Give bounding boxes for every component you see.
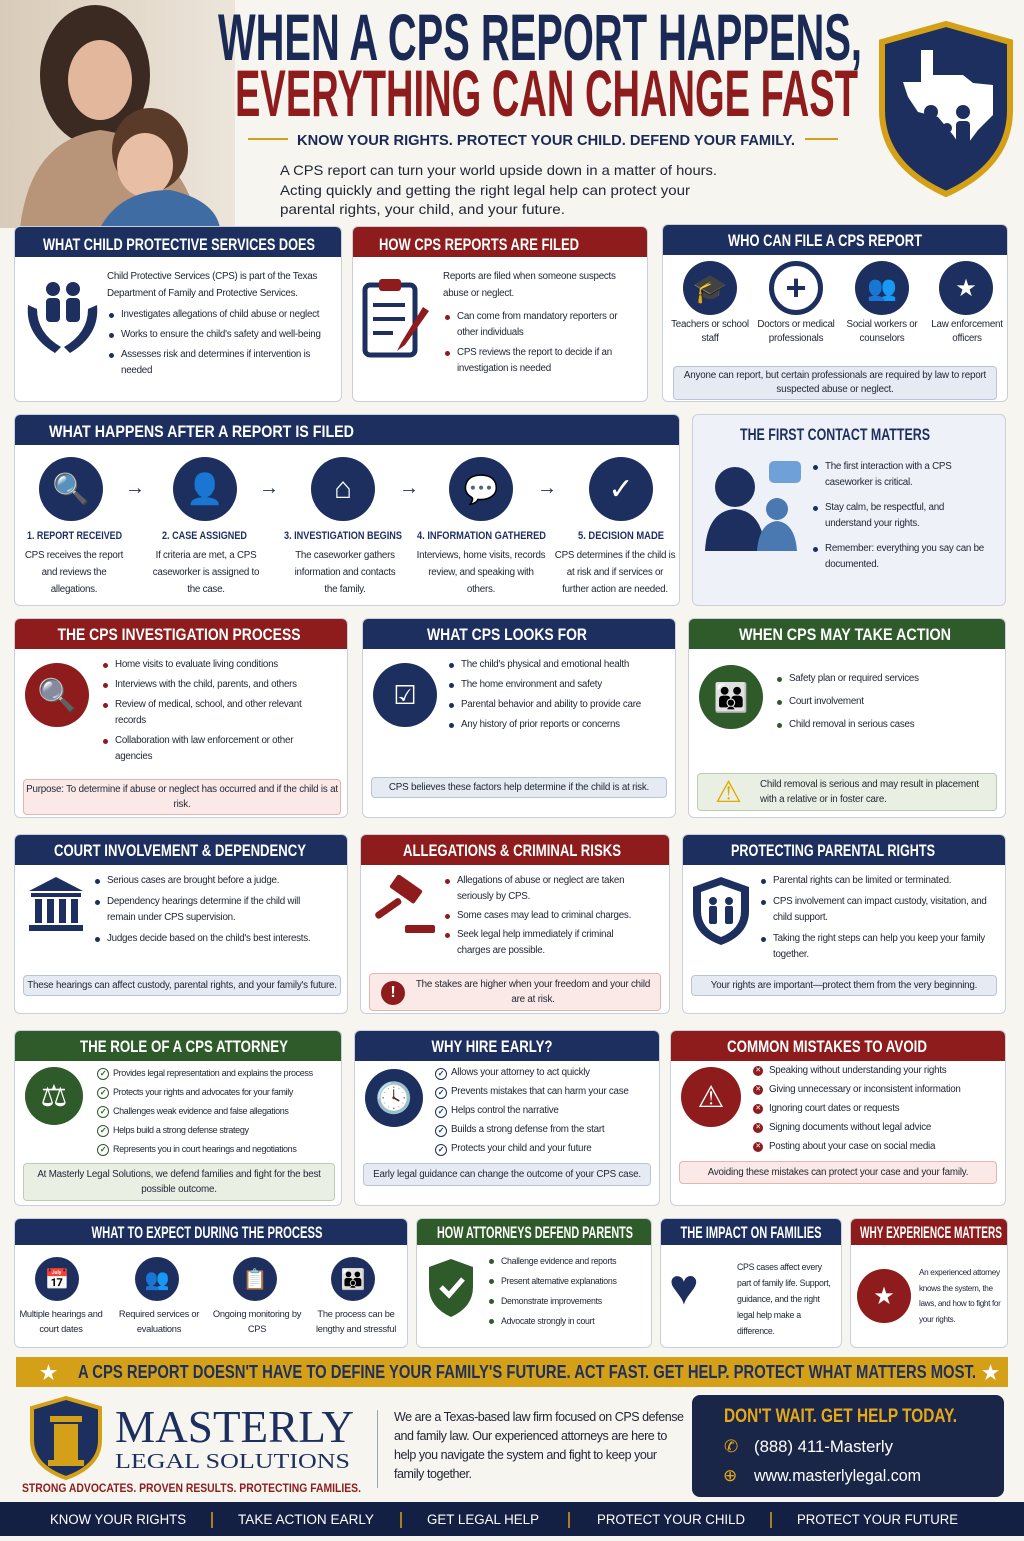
bottom bar: GET LEGAL HELP bbox=[427, 1512, 539, 1527]
steps: CPS determines if the child is at risk and if services or further action are needed. bbox=[555, 550, 675, 595]
panel: first contact: The first interaction with a CPS caseworker is critical. bbox=[825, 461, 952, 488]
panel: why hire early: Builds a strong defense from the start bbox=[451, 1124, 604, 1135]
panel: what CPS does: Child Protective Services (CPS) is part of the Texas Department of Family and Protective Services. bbox=[107, 271, 317, 299]
panel: what CPS looks for: CPS believes these factors help determine if the child is at risk. bbox=[389, 782, 649, 793]
logo: MASTERLY bbox=[115, 1401, 354, 1452]
bottom bar bbox=[0, 1502, 1024, 1536]
panel: court involvement: Judges decide based on the child's best interests. bbox=[107, 933, 310, 944]
panel: when CPS may take action: Safety plan or required services bbox=[789, 673, 919, 684]
icon: alert: ! bbox=[390, 984, 396, 1001]
panel: role of CPS attorney: THE ROLE OF A CPS ATTORNEY bbox=[80, 1037, 289, 1056]
panel: allegations criminal risks: The stakes are higher when your freedom and your child are at risk. bbox=[416, 979, 650, 1005]
panel: what CPS looks for: The child's physical and emotional health bbox=[461, 659, 629, 670]
logo bbox=[22, 1396, 361, 1495]
panel: role of CPS attorney: Protects your rights and advocates for your family bbox=[113, 1087, 293, 1097]
panel: why hire early: Allows your attorney to act quickly bbox=[451, 1067, 590, 1078]
panel: how attorneys defend: Advocate strongly in court bbox=[501, 1316, 594, 1326]
panel: first contact: Remember: everything you say can be documented. bbox=[825, 543, 984, 570]
panel: why experience matters: An experienced attorney knows the system, the laws, and how to fight for your rights. bbox=[919, 1268, 1000, 1324]
panel: first contact: Stay calm, be respectful, and understand your rights. bbox=[825, 502, 944, 529]
panel: what to expect: The process can be lengthy and stressful bbox=[316, 1309, 396, 1334]
panel: how reports filed: Can come from mandatory reporters or other individuals bbox=[457, 311, 617, 338]
contact box: ⊕ bbox=[723, 1466, 737, 1485]
steps: 3. INVESTIGATION BEGINS bbox=[284, 530, 402, 542]
panel: how attorneys defend: Demonstrate improvements bbox=[501, 1296, 602, 1306]
panel: protecting parental rights: CPS involvement can impact custody, visitation, and child support. bbox=[773, 896, 987, 923]
panel: impact on families: CPS cases affect every part of family life. Support, guidance, and the right legal help make a difference. bbox=[737, 1262, 830, 1336]
text: We are a Texas-based law firm focused on CPS defense and family law. Our experienced attorneys are here to help you navigate the system and fight to keep your family together. bbox=[394, 1410, 684, 1481]
photo: mother and child bbox=[0, 0, 235, 228]
panel: why experience matters bbox=[850, 1218, 1008, 1348]
panel: role of CPS attorney: At Masterly Legal Solutions, we defend families and fight for the best possible outcome. bbox=[37, 1169, 321, 1195]
contact box bbox=[692, 1395, 1004, 1497]
panel: role of CPS attorney: Provides legal representation and explains the process bbox=[113, 1068, 313, 1078]
icon: checklist: ☑ bbox=[393, 680, 417, 710]
icon: magnifier bbox=[25, 663, 89, 727]
panel: what to expect: Ongoing monitoring by CPS bbox=[213, 1309, 301, 1334]
panel: role of CPS attorney: Challenges weak evidence and false allegations bbox=[113, 1106, 289, 1116]
icon: warning: ⚠ bbox=[715, 776, 742, 809]
icon: checklist bbox=[373, 663, 437, 727]
steps: 👤 bbox=[186, 472, 224, 506]
icons: reporters: + bbox=[785, 267, 807, 308]
icons: reporters: ★ bbox=[955, 274, 977, 302]
panel: first contact: THE FIRST CONTACT MATTERS bbox=[740, 425, 930, 444]
icons: reporters: Teachers or school staff bbox=[671, 319, 749, 344]
panel: what to expect: Multiple hearings and court dates bbox=[19, 1309, 103, 1334]
icon: clipboard bbox=[362, 279, 429, 358]
panel: what to expect: 📋 bbox=[243, 1268, 267, 1290]
panel: what CPS does: Investigates allegations of child abuse or neglect bbox=[121, 309, 319, 320]
panel: when CPS may take action bbox=[688, 618, 1006, 818]
panel: what to expect: Required services or evaluations bbox=[119, 1309, 199, 1334]
icon: hands family bbox=[28, 282, 98, 353]
intro paragraph: A CPS report can turn your world upside down in a matter of hours. bbox=[280, 162, 717, 178]
icon: family green: 👪 bbox=[714, 682, 748, 712]
panel: common mistakes bbox=[670, 1030, 1006, 1206]
panel: common mistakes: COMMON MISTAKES TO AVOID bbox=[727, 1037, 927, 1056]
panel: when CPS may take action: Child removal in serious cases bbox=[789, 719, 914, 730]
panel: common mistakes: Signing documents without legal advice bbox=[769, 1122, 931, 1133]
panel: role of CPS attorney bbox=[14, 1030, 342, 1206]
panel: why hire early: WHY HIRE EARLY? bbox=[432, 1037, 552, 1056]
panel: court involvement: These hearings can affect custody, parental rights, and your family's future. bbox=[27, 980, 337, 991]
panel: first contact bbox=[692, 414, 1006, 606]
contact box: www.masterlylegal.com bbox=[753, 1466, 921, 1485]
panel: protecting parental rights: Your rights are important—protect them from the very beginning. bbox=[711, 980, 977, 991]
steps: → bbox=[399, 477, 419, 499]
steps: → bbox=[125, 477, 145, 499]
panel: what to expect: 👪 bbox=[341, 1268, 365, 1290]
icons: reporters: 👥 bbox=[867, 274, 897, 302]
bottom bar: TAKE ACTION EARLY bbox=[238, 1512, 374, 1527]
panel: when CPS may take action: WHEN CPS MAY TAKE ACTION bbox=[739, 625, 951, 644]
bottom bar: PROTECT YOUR FUTURE bbox=[797, 1512, 958, 1527]
icons: reporters: 🎓 bbox=[693, 272, 727, 304]
icon: alert bbox=[381, 981, 405, 1005]
steps: 4. INFORMATION GATHERED bbox=[417, 530, 546, 542]
panel: common mistakes: Ignoring court dates or requests bbox=[769, 1103, 899, 1114]
panel: impact on families bbox=[660, 1218, 842, 1348]
panel: allegations criminal risks: Seek legal help immediately if criminal charges are possible. bbox=[457, 929, 613, 956]
contact box: (888) 411-Masterly bbox=[754, 1437, 893, 1456]
panel: how reports filed: Reports are filed when someone suspects abuse or neglect. bbox=[443, 271, 616, 299]
icons: reporters: Social workers or counselors bbox=[847, 319, 917, 344]
steps: 2. CASE ASSIGNED bbox=[162, 530, 247, 542]
icon: warning red bbox=[681, 1067, 741, 1127]
logo: LEGAL SOLUTIONS bbox=[115, 1449, 350, 1473]
contact box: DON'T WAIT. GET HELP TODAY. bbox=[724, 1406, 957, 1427]
panel: protecting parental rights bbox=[682, 834, 1006, 1014]
panel: when CPS may take action: Court involvement bbox=[789, 696, 864, 707]
panel: investigation process: THE CPS INVESTIGATION PROCESS bbox=[58, 625, 300, 644]
icon: family green bbox=[699, 665, 763, 729]
panel: what CPS looks for: WHAT CPS LOOKS FOR bbox=[427, 625, 587, 644]
panel: what to expect bbox=[14, 1218, 408, 1348]
steps: The caseworker gathers information and contacts the family. bbox=[295, 550, 395, 595]
panel: common mistakes: Giving unnecessary or inconsistent information bbox=[769, 1084, 961, 1095]
panel: allegations criminal risks: Allegations of abuse or neglect are taken seriously by CPS. bbox=[457, 875, 624, 902]
panel: court involvement: Serious cases are brought before a judge. bbox=[107, 875, 279, 886]
panel: investigation process: Home visits to evaluate living conditions bbox=[115, 659, 278, 670]
banner: ★ bbox=[40, 1363, 57, 1384]
panel: investigation process: Collaboration with law enforcement or other agencies bbox=[115, 735, 293, 762]
title bbox=[218, 0, 862, 125]
panel: what CPS does: Assesses risk and determines if intervention is needed bbox=[121, 349, 310, 376]
banner: ★ bbox=[982, 1363, 999, 1384]
steps: If criteria are met, a CPS caseworker is assigned to the case. bbox=[153, 550, 259, 595]
icon: clock: 🕓 bbox=[375, 1082, 413, 1114]
panel: what CPS looks for: Parental behavior and ability to provide care bbox=[461, 699, 641, 710]
icon: scales bbox=[25, 1067, 83, 1125]
icons: reporters: Doctors or medical professionals bbox=[757, 319, 835, 344]
panel: what happens after report bbox=[14, 414, 680, 606]
steps: Interviews, home visits, records review, and speaking with others. bbox=[417, 550, 545, 595]
icon: courthouse bbox=[29, 877, 83, 931]
panel: protecting parental rights: Parental rights can be limited or terminated. bbox=[773, 875, 951, 886]
icon: warning red: ⚠ bbox=[698, 1080, 724, 1114]
panel: why hire early: Helps control the narrative bbox=[451, 1105, 559, 1116]
panel: how attorneys defend: Challenge evidence and reports bbox=[501, 1256, 616, 1266]
panel: impact on families: ♥ bbox=[669, 1259, 699, 1315]
steps: 5. DECISION MADE bbox=[578, 530, 664, 542]
panel: how reports filed bbox=[352, 226, 648, 402]
about text bbox=[377, 1410, 378, 1488]
icons: reporters: Law enforcement officers bbox=[931, 319, 1003, 344]
icon: Texas shield bbox=[879, 20, 1013, 198]
icon: magnifier: 🔍 bbox=[37, 677, 77, 713]
icon: conversation bbox=[705, 461, 801, 551]
steps: 1. REPORT RECEIVED bbox=[27, 530, 122, 542]
icon: shield family bbox=[693, 877, 749, 945]
panel: court involvement: Dependency hearings determine if the child will remain under CPS supervision. bbox=[107, 896, 300, 923]
panel: investigation process: Interviews with the child, parents, and others bbox=[115, 679, 297, 690]
panel: what CPS looks for: The home environment and safety bbox=[461, 679, 602, 690]
panel: allegations criminal risks bbox=[360, 834, 670, 1014]
panel: court involvement bbox=[14, 834, 348, 1014]
panel: why hire early: Early legal guidance can change the outcome of your CPS case. bbox=[373, 1169, 641, 1180]
panel: role of CPS attorney: Represents you in court hearings and negotiations bbox=[113, 1144, 296, 1154]
panel: what CPS does bbox=[14, 226, 342, 402]
steps: → bbox=[259, 477, 279, 499]
panel: investigation process bbox=[14, 618, 348, 818]
panel: why hire early: Prevents mistakes that can harm your case bbox=[451, 1086, 629, 1097]
panel: how attorneys defend: Present alternative explanations bbox=[501, 1276, 617, 1286]
panel: what CPS does: Works to ensure the child's safety and well-being bbox=[121, 329, 321, 340]
bottom bar: PROTECT YOUR CHILD bbox=[597, 1512, 745, 1527]
panel: what happens after report: WHAT HAPPENS AFTER A REPORT IS FILED bbox=[49, 422, 354, 441]
intro paragraph bbox=[280, 162, 717, 217]
panel: common mistakes: Avoiding these mistakes can protect your case and your family. bbox=[708, 1167, 968, 1178]
panel: why hire early bbox=[354, 1030, 660, 1206]
intro paragraph: Acting quickly and getting the right legal help can protect your bbox=[280, 182, 690, 198]
steps: 🔍 bbox=[52, 472, 90, 506]
panel: how attorneys defend bbox=[416, 1218, 652, 1348]
contact box: ✆ bbox=[724, 1437, 738, 1456]
icon: gavel bbox=[375, 875, 435, 933]
panel: what to expect: 👥 bbox=[145, 1268, 169, 1290]
icon: scales: ⚖ bbox=[41, 1080, 67, 1112]
steps: → bbox=[537, 477, 557, 499]
panel: what to expect: 📅 bbox=[45, 1268, 69, 1290]
panel: who can file: Anyone can report, but certain professionals are required by law to report suspected abuse or neglect. bbox=[684, 370, 986, 395]
panel: allegations criminal risks: Some cases may lead to criminal charges. bbox=[457, 910, 631, 921]
steps bbox=[25, 457, 676, 595]
panel: protecting parental rights: PROTECTING PARENTAL RIGHTS bbox=[731, 841, 935, 860]
panel: how reports filed: CPS reviews the report to decide if an investigation is needed bbox=[457, 347, 612, 374]
icons: reporters bbox=[671, 261, 1003, 344]
panel: why hire early: Protects your child and your future bbox=[451, 1143, 591, 1154]
steps: 💬 bbox=[464, 474, 498, 504]
banner bbox=[16, 1357, 1008, 1387]
panel: how reports filed: HOW CPS REPORTS ARE FILED bbox=[379, 235, 579, 254]
steps: ⌂ bbox=[334, 472, 352, 505]
bottom bar: KNOW YOUR RIGHTS bbox=[50, 1512, 186, 1527]
panel: protecting parental rights: Taking the right steps can help you keep your family together. bbox=[773, 933, 985, 960]
panel: why experience matters: ★ bbox=[873, 1282, 895, 1310]
panel: who can file: WHO CAN FILE A CPS REPORT bbox=[728, 231, 922, 250]
panel: investigation process: Review of medical, school, and other relevant records bbox=[115, 699, 301, 726]
steps: ✓ bbox=[608, 472, 634, 506]
panel: common mistakes: Posting about your case on social media bbox=[769, 1141, 935, 1152]
panel: role of CPS attorney: Helps build a strong defense strategy bbox=[113, 1125, 249, 1135]
panel: common mistakes: Speaking without understanding your rights bbox=[769, 1065, 946, 1076]
panel: investigation process: Purpose: To determine if abuse or neglect has occurred and if the child is at risk. bbox=[26, 784, 338, 810]
panel: who can file bbox=[662, 224, 1008, 402]
intro paragraph: parental rights, your child, and your future. bbox=[280, 201, 565, 217]
icon: clock bbox=[365, 1069, 423, 1127]
panel: what CPS looks for bbox=[362, 618, 676, 818]
subtitle: KNOW YOUR RIGHTS. PROTECT YOUR CHILD. DEFEND YOUR FAMILY. bbox=[297, 132, 795, 149]
panel: when CPS may take action: Child removal is serious and may result in placement with a relative or in foster care. bbox=[760, 779, 979, 805]
steps: CPS receives the report and reviews the allegations. bbox=[25, 550, 123, 595]
panel: what CPS looks for: Any history of prior reports or concerns bbox=[461, 719, 620, 730]
